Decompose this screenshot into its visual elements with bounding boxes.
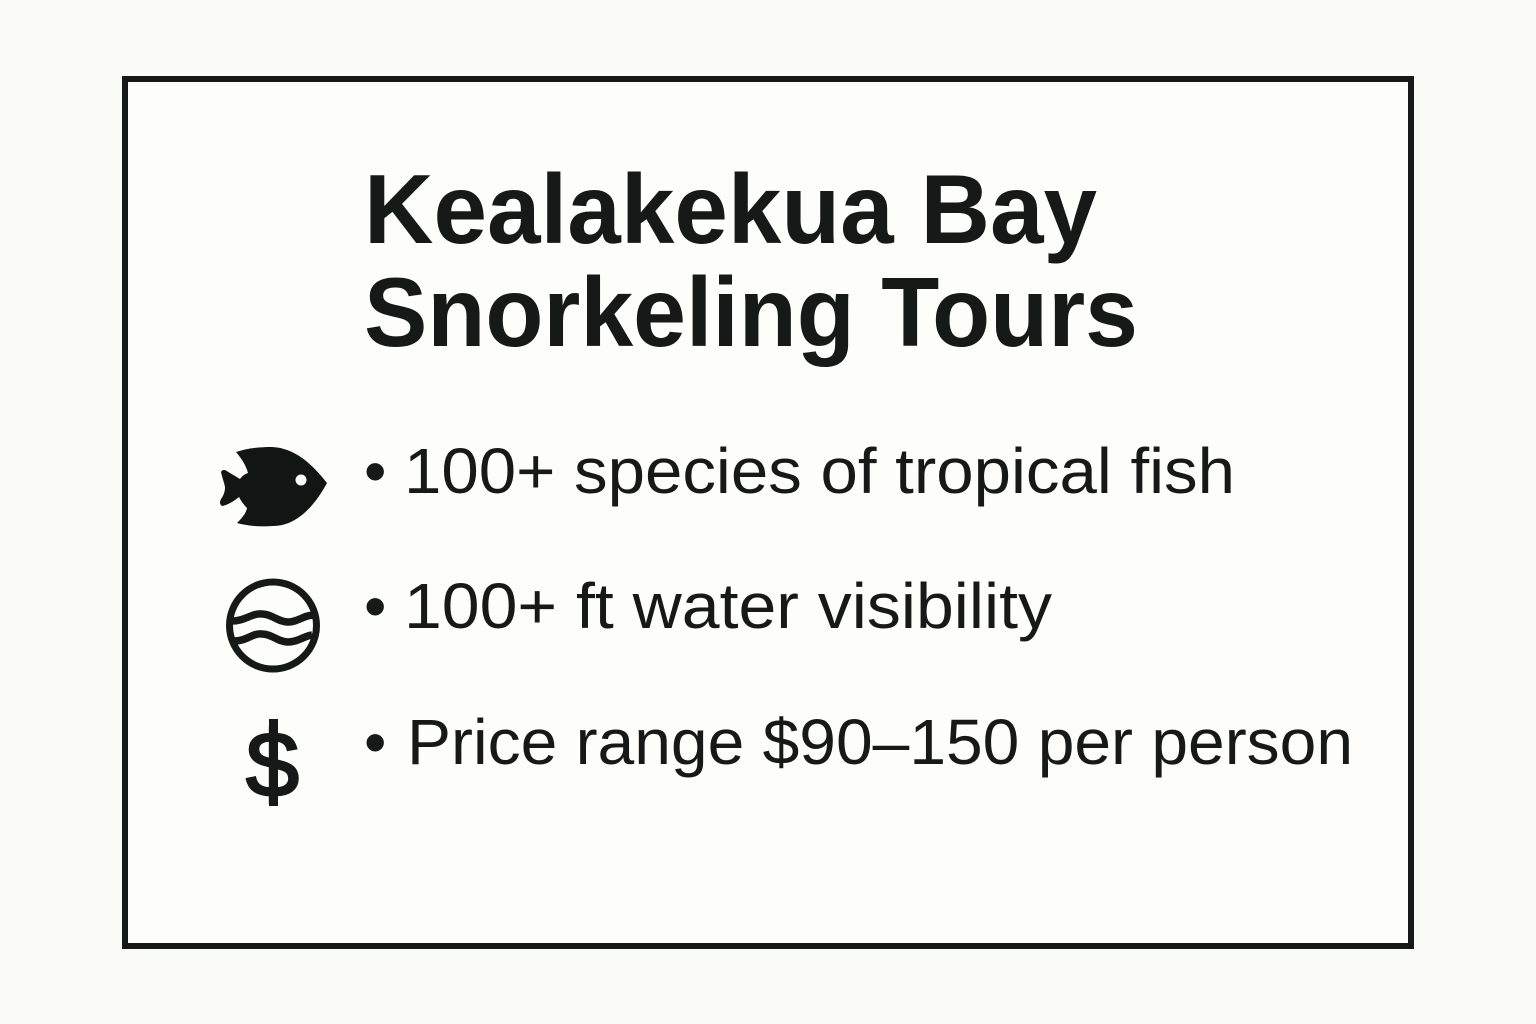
list item: fish species: • <box>364 435 386 507</box>
icon: water waves in circle <box>230 582 316 669</box>
list item: fish species: 100+ species of tropical fish <box>404 435 1235 507</box>
title: Snorkeling Tours <box>364 257 1138 367</box>
icon: dollar sign: $ <box>246 714 299 816</box>
panel: framed card <box>125 79 1411 946</box>
list item: water visibility: 100+ ft water visibility <box>404 570 1052 642</box>
list item: water visibility: • <box>364 570 386 642</box>
title <box>364 154 1138 367</box>
title: Kealakekua Bay <box>364 154 1097 264</box>
list item: price range: • <box>364 706 386 778</box>
icon: fish <box>220 447 327 526</box>
list item: price range: Price range $90–150 per person <box>407 706 1353 778</box>
